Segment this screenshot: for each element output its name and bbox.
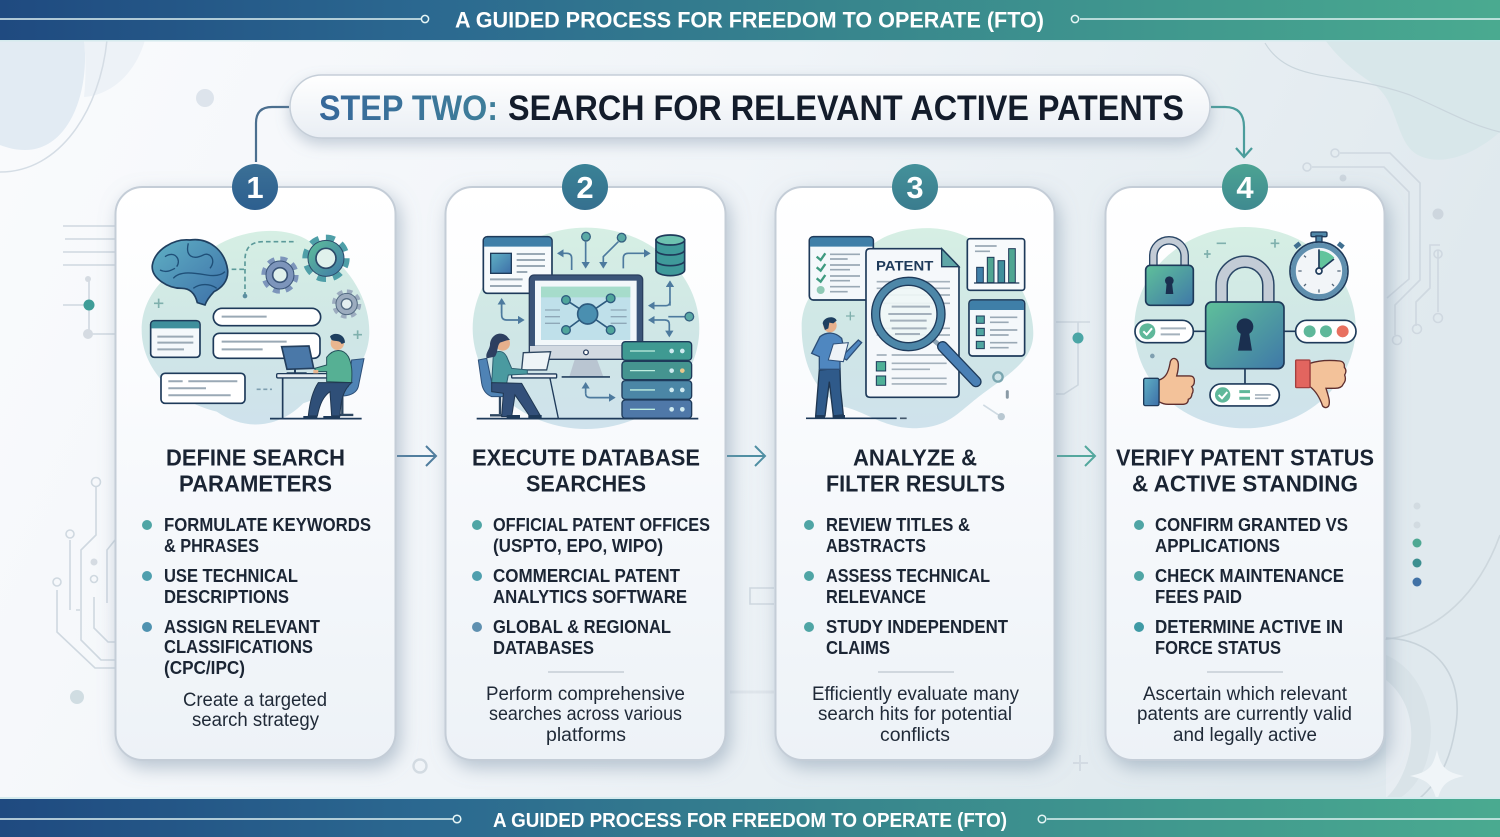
bullet list: CONFIRM GRANTED VS [1155,514,1348,535]
bullet list: ASSIGN RELEVANT [164,616,321,637]
summary text: and legally active [1173,725,1317,746]
bullet list: ABSTRACTS [826,535,926,556]
arrow: step 1 to step 2 [397,446,436,466]
summary text: Ascertain which relevant [1143,684,1348,705]
title pill: SEARCH FOR RELEVANT ACTIVE PATENTS [508,89,1184,128]
heading: EXECUTE DATABASE [472,444,700,470]
badge 2: 2 [576,170,594,205]
illustration: monitor, databases and servers [473,228,699,429]
panel: step 2 execute database searches [446,164,726,760]
heading: FILTER RESULTS [826,470,1005,496]
bullet list [804,514,1009,658]
title pill [290,75,1210,138]
badge 4: 4 [1236,170,1254,205]
bullet list: OFFICIAL PATENT OFFICES [493,514,710,535]
arrow: step 3 to step 4 [1057,446,1095,466]
top banner [0,0,1500,42]
connector arrow: title to step 4 [1211,107,1252,157]
summary text: platforms [546,725,626,746]
illustration: patent document under magnifier [802,228,1033,428]
bullet list: (USPTO, EPO, WIPO) [493,535,663,556]
heading [826,444,1005,496]
bullet list: FORCE STATUS [1155,637,1281,658]
summary text: Perform comprehensive [486,684,685,705]
title pill: STEP TWO: [319,89,498,128]
heading [1116,444,1374,496]
illustration: brain, gears and person at desk [142,231,369,424]
bullet list [472,514,710,658]
bullet list: STUDY INDEPENDENT [826,616,1009,637]
bullet list: COMMERCIAL PATENT [493,565,681,586]
summary text [812,684,1019,746]
illustration: patent document under magnifier: PATENT [876,257,934,273]
summary text [183,690,327,731]
heading [166,444,345,496]
badge 2 [562,164,608,210]
panel: step 4 verify patent status [1106,164,1384,760]
bullet list: & PHRASES [164,535,259,556]
heading: VERIFY PATENT STATUS [1116,444,1374,470]
top banner: A GUIDED PROCESS FOR FREEDOM TO OPERATE (FTO) [455,8,1044,32]
bullet list: DETERMINE ACTIVE IN [1155,616,1343,637]
summary text [486,684,685,746]
bullet list [142,514,371,678]
bullet list: CHECK MAINTENANCE [1155,565,1344,586]
bullet list: GLOBAL & REGIONAL [493,616,671,637]
bullet list [1134,514,1348,658]
badge 1 [232,164,278,210]
heading: ANALYZE & [853,444,977,470]
badge 4 [1222,164,1268,210]
heading: DEFINE SEARCH [166,444,345,470]
bullet list: FORMULATE KEYWORDS [164,514,371,535]
bottom banner: A GUIDED PROCESS FOR FREEDOM TO OPERATE (FTO) [493,809,1007,832]
summary text: searches across various [489,704,682,725]
summary text: patents are currently valid [1137,704,1352,725]
bullet list: APPLICATIONS [1155,535,1280,556]
heading: & ACTIVE STANDING [1132,470,1358,496]
badge 3: 3 [906,170,924,205]
summary text: conflicts [880,725,950,746]
summary text: search strategy [192,710,319,731]
bullet list: ASSESS TECHNICAL [826,565,990,586]
illustration: locks, stopwatch and thumbs [1134,227,1356,428]
bullet list: RELEVANCE [826,586,926,607]
bullet list: DATABASES [493,637,594,658]
summary text: search hits for potential [818,704,1012,725]
bullet list: USE TECHNICAL [164,565,298,586]
bullet list: REVIEW TITLES & [826,514,970,535]
summary text: Efficiently evaluate many [812,684,1019,705]
summary text: Create a targeted [183,690,327,711]
panel: step 1 define search parameters [116,164,396,760]
bullet list: DESCRIPTIONS [164,586,289,607]
bullet list: ANALYTICS SOFTWARE [493,586,687,607]
connector: title to step 1 [256,107,289,162]
bullet list: CLASSIFICATIONS [164,636,313,657]
heading [472,444,700,496]
bullet list: CLAIMS [826,637,890,658]
bottom banner [0,797,1500,837]
badge 3 [892,164,938,210]
bullet list: FEES PAID [1155,586,1242,607]
arrow: step 2 to step 3 [727,446,765,466]
bullet list: (CPC/IPC) [164,657,245,678]
panel: step 3 analyze and filter results [776,164,1054,760]
summary text [1137,684,1352,746]
badge 1: 1 [246,170,264,205]
heading: SEARCHES [526,470,646,496]
heading: PARAMETERS [179,470,332,496]
